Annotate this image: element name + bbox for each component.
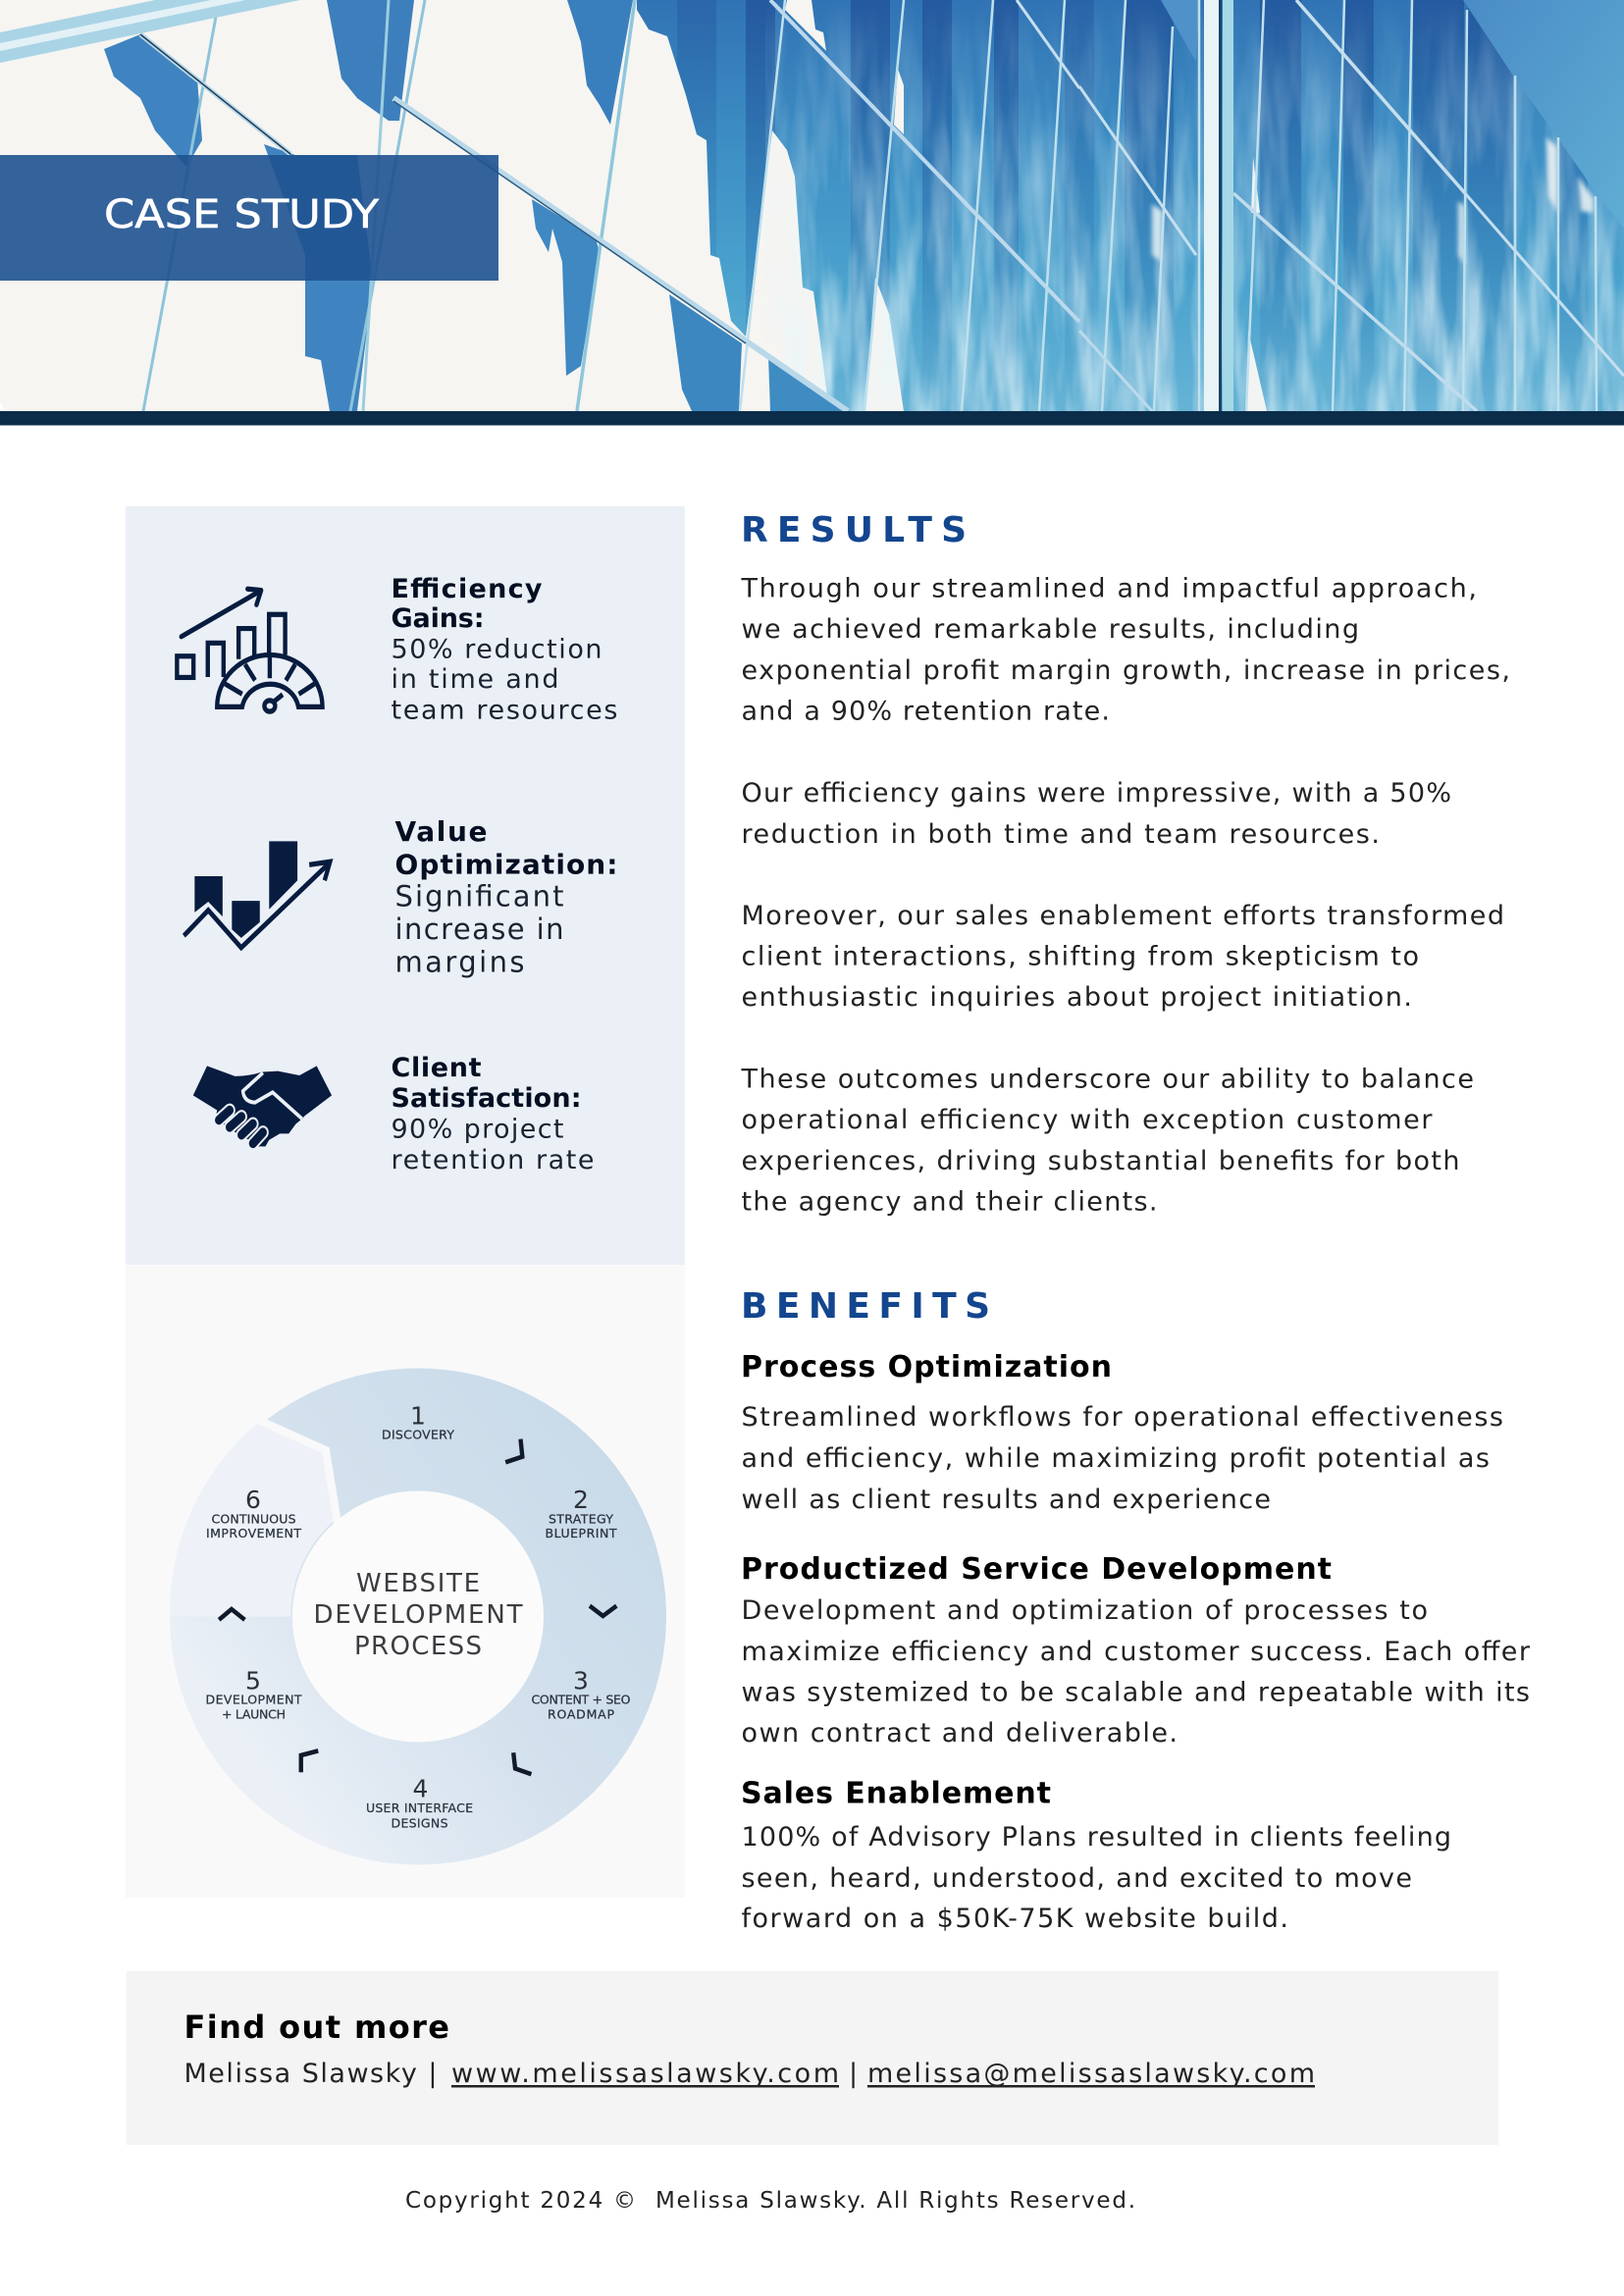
step 4: user interface designs: USER INTERFACE: [366, 1800, 473, 1815]
subheading: productized service development: Productized Service Development: [741, 1552, 1332, 1587]
text: results body: These outcomes underscore our ability to balance: [740, 1064, 1474, 1095]
step 4: user interface designs: DESIGNS: [391, 1815, 448, 1831]
heading: find out more: Find out more: [184, 2009, 449, 2046]
step 6: continuous improvement: IMPROVEMENT: [206, 1526, 301, 1540]
step 5: development and launch: [206, 1666, 302, 1721]
step 6: continuous improvement: CONTINUOUS: [212, 1511, 296, 1527]
step 4: user interface designs: [366, 1774, 473, 1831]
chart title: website development process: DEVELOPMENT: [314, 1600, 523, 1630]
text: client satisfaction: Client: [391, 1053, 482, 1083]
text: results body: experiences, driving substantial benefits for both: [742, 1146, 1460, 1176]
text: productized service body: own contract and deliverable.: [742, 1718, 1178, 1748]
text: efficiency gains: Efficiency: [391, 574, 543, 604]
panel: website development process: [126, 1265, 685, 1898]
text: efficiency gains: in time and: [391, 664, 559, 695]
step 3: content and seo roadmap: CONTENT + SEO: [532, 1692, 631, 1707]
text: results body: and a 90% retention rate.: [742, 697, 1110, 727]
text: efficiency gains: Gains:: [391, 603, 485, 634]
chart title: website development process: PROCESS: [354, 1632, 482, 1661]
step 2: strategy blueprint: STRATEGY: [549, 1511, 613, 1527]
heading: benefits: BENEFITS: [741, 1286, 990, 1327]
text: client satisfaction: retention rate: [391, 1145, 595, 1175]
text: results body: enthusiastic inquiries about project initiation.: [742, 982, 1412, 1013]
contact line: www.melissaslawsky.com: [451, 2059, 839, 2089]
text: results body: the agency and their clients.: [742, 1187, 1158, 1217]
text: efficiency gains: 50% reduction: [391, 634, 602, 665]
contact line: Melissa Slawsky |: [184, 2059, 438, 2089]
text: client satisfaction: 90% project: [391, 1115, 563, 1144]
text: process optimization body: [742, 1402, 1503, 1515]
text: results body: [740, 573, 1510, 1217]
copyright footer: Copyright 2024 © Melissa Slawsky. All Rights Reserved.: [405, 2188, 1135, 2214]
title banner: case study: CASE STUDY: [104, 192, 380, 237]
subheading: sales enablement: Sales Enablement: [741, 1776, 1051, 1811]
text: sales enablement body: [742, 1822, 1451, 1934]
text: process optimization body: well as client results and experience: [742, 1485, 1271, 1515]
chart title: website development process: [314, 1569, 523, 1661]
text: process optimization body: Streamlined workflows for operational effectiveness: [742, 1402, 1503, 1433]
icon: handshake: [193, 1066, 332, 1146]
icon: efficiency gauge and bars: [177, 589, 323, 711]
text: productized service body: was systemized to be scalable and repeatable with its: [742, 1678, 1530, 1707]
step 4: user interface designs: 4: [413, 1774, 428, 1803]
chart: process ring: [170, 1368, 666, 1864]
text: value optimization: margins: [394, 946, 524, 979]
step 5: development and launch: DEVELOPMENT: [206, 1692, 302, 1707]
step 2: strategy blueprint: [546, 1486, 617, 1540]
text: productized service body: maximize efficiency and customer success. Each offer: [742, 1637, 1531, 1667]
step 1: discovery: DISCOVERY: [382, 1427, 454, 1442]
text: results body: client interactions, shifting from skepticism to: [742, 942, 1419, 971]
text: value optimization: Optimization:: [394, 848, 618, 881]
panel: key outcomes: [126, 506, 685, 1265]
title banner: case study: [0, 155, 498, 281]
text: value optimization: Value: [394, 815, 487, 848]
step 5: development and launch: + LAUNCH: [222, 1707, 286, 1721]
contact line: |: [849, 2059, 858, 2089]
contact line: melissa@melissaslawsky.com: [867, 2059, 1315, 2089]
step 1: discovery: [382, 1401, 454, 1442]
arrows: clockwise chevrons: [219, 1439, 616, 1774]
text: results body: Our efficiency gains were impressive, with a 50%: [742, 778, 1451, 809]
step 6: continuous improvement: [206, 1486, 301, 1540]
text: client satisfaction: [391, 1053, 595, 1175]
text: sales enablement body: 100% of Advisory Plans resulted in clients feeling: [742, 1822, 1451, 1852]
text: results body: reduction in both time and team resources.: [742, 819, 1380, 850]
step 3: content and seo roadmap: 3: [573, 1666, 589, 1696]
step 1: discovery: 1: [410, 1401, 426, 1431]
heading: results: RESULTS: [741, 510, 967, 550]
bottom band under photo: [0, 411, 1624, 426]
step 6: continuous improvement: 6: [245, 1486, 261, 1514]
text: value optimization: [394, 815, 618, 979]
text: value optimization: Significant: [394, 879, 563, 913]
text: process optimization body: and efficiency, while maximizing profit potential as: [742, 1443, 1490, 1474]
panel: find out more: [126, 1971, 1498, 2145]
step 3: content and seo roadmap: [532, 1666, 631, 1721]
step 3: content and seo roadmap: ROADMAP: [548, 1707, 614, 1721]
step 2: strategy blueprint: 2: [573, 1486, 589, 1514]
text: productized service body: [742, 1595, 1531, 1748]
text: results body: Through our streamlined and impactful approach,: [740, 573, 1477, 604]
text: results body: exponential profit margin growth, increase in prices,: [742, 655, 1510, 686]
text: productized service body: Development and optimization of processes to: [742, 1595, 1428, 1626]
text: sales enablement body: seen, heard, understood, and excited to move: [742, 1863, 1412, 1894]
text: results body: we achieved remarkable results, including: [742, 614, 1359, 645]
text: results body: operational efficiency with exception customer: [742, 1105, 1433, 1135]
text: results body: Moreover, our sales enablement efforts transformed: [742, 901, 1504, 931]
step 5: development and launch: 5: [245, 1666, 261, 1696]
text: client satisfaction: Satisfaction:: [391, 1083, 581, 1114]
contact line: [184, 2059, 1315, 2089]
text: sales enablement body: forward on a $50K-75K website build.: [742, 1904, 1288, 1934]
header photo: glass building: [0, 0, 1624, 411]
step 2: strategy blueprint: BLUEPRINT: [546, 1526, 617, 1540]
text: efficiency gains: [391, 574, 618, 726]
icon: value bars with rising arrow: [183, 841, 330, 948]
text: efficiency gains: team resources: [391, 695, 618, 726]
text: value optimization: increase in: [394, 913, 563, 946]
chart title: website development process: WEBSITE: [356, 1569, 480, 1598]
subheading: process optimization: Process Optimization: [741, 1350, 1112, 1384]
